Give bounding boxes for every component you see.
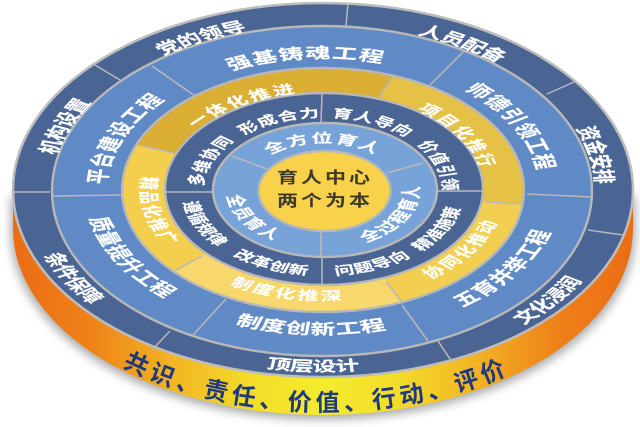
outer ring labels: 人员配备: [418, 25, 506, 62]
outer ring labels: [37, 20, 616, 373]
gold ring labels: 制度化推深: [230, 276, 342, 302]
gold ring labels: 一体化推进: [190, 83, 294, 126]
gold ring segments: [122, 68, 524, 312]
blue ring labels: 质量提升工程: [88, 217, 178, 299]
blue ring: engineering projects: [52, 26, 592, 356]
inner navy ring labels: 问题导向: [334, 250, 410, 276]
light blue ring: [213, 123, 437, 257]
light blue ring labels: 全过程育人: [360, 186, 421, 243]
light blue ring labels: 全员育人: [226, 194, 277, 240]
center title: [277, 169, 373, 210]
blue ring labels: 制度创新工程: [236, 312, 386, 336]
inner navy ring labels: 多维协同: [187, 135, 234, 186]
inner navy ring labels: 改革创新: [232, 248, 309, 276]
outer ring labels: 资金安排: [575, 126, 616, 184]
gold ring labels: 精品化推广: [138, 177, 178, 242]
light blue ring labels: 全方位育人: [264, 131, 377, 155]
gold ring labels: [138, 83, 498, 302]
blue ring labels: 强基铸魂工程: [224, 45, 384, 72]
outer ring labels: 文化浸润: [512, 275, 582, 325]
blue ring labels: 平台建设工程: [86, 92, 166, 184]
side band slogan: 共识、责任、价值、行动、评价: [123, 351, 504, 414]
blue ring labels: 五育并举工程: [452, 229, 552, 308]
inner navy ring labels: [182, 107, 462, 276]
blue ring labels: [86, 45, 558, 336]
outer ring labels: 机构设置: [37, 98, 92, 154]
outer ring labels: 党的领导: [155, 20, 245, 56]
inner navy ring labels: 形成合力: [236, 107, 318, 135]
gold ring labels: 协同化推动: [421, 220, 498, 280]
center yellow disc: [258, 151, 390, 231]
outer ring labels: 条件保障: [44, 252, 105, 304]
inner navy ring labels: 价值引领: [416, 140, 460, 190]
drop shadow: [11, 196, 635, 419]
inner navy ring labels: 精准施策: [410, 206, 462, 251]
blue ring labels: 师德引领工程: [465, 82, 558, 170]
gold ring labels: 项目化推行: [418, 102, 496, 166]
ring labels in perspective: [37, 20, 616, 373]
center title: 两个为本: [277, 192, 373, 210]
inner navy ring labels: 育人导向: [334, 108, 414, 137]
center title: 育人中心: [277, 169, 373, 186]
light blue ring labels: [226, 131, 421, 243]
inner navy ring: [165, 93, 483, 285]
inner navy ring labels: 遵循规律: [182, 200, 228, 246]
outer ring labels: 顶层设计: [266, 356, 358, 373]
